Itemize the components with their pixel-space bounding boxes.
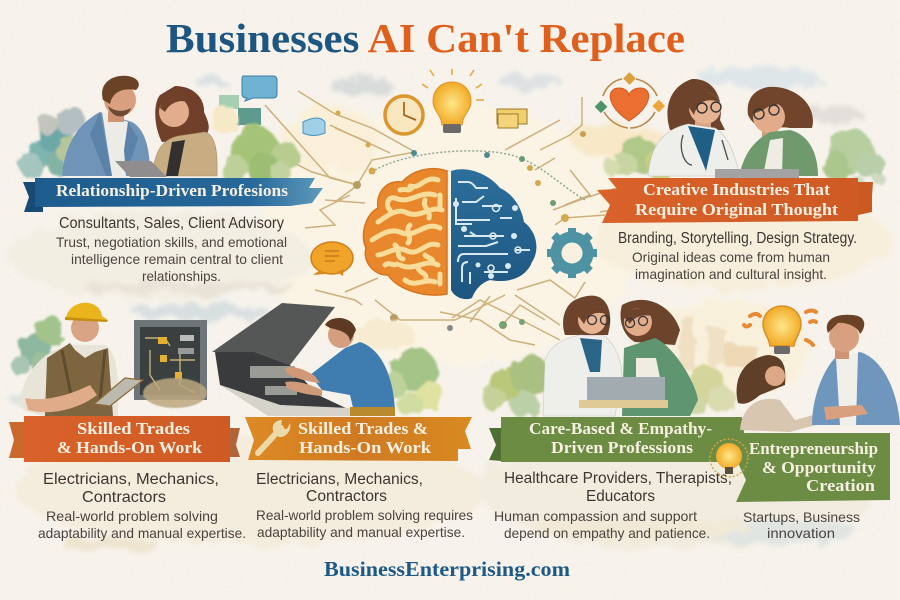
icon: ribbon bulb [710,439,748,477]
icon: heart with ring [595,72,665,128]
text: relationship: intelligence remain central to client [71,251,283,267]
brain illustration [363,169,536,299]
text: creative: Branding, Storytelling, Design Strategy. [618,230,857,247]
doctor [543,296,622,416]
ribbon: skilled trades amber [245,417,472,461]
text: skilled trades left: Real-world problem solving [46,508,218,524]
icon: light bulb [422,69,484,133]
electrician [20,303,118,416]
text: skilled trades right: Real-world problem solving requires [256,507,473,523]
woman with green jacket [739,87,818,176]
watercolor washes [10,69,890,552]
trees and city [483,318,756,419]
brain: blue right hemisphere [451,169,536,299]
text: skilled trades right: Contractors [306,488,387,505]
trees behind couple [18,105,299,186]
woman in green [621,300,698,416]
text: entrepreneurship: Startups, Business [743,509,860,525]
icon: speech bubble orange [311,242,353,276]
ribbon: creative [597,178,873,223]
panel: skilled trades (electrician) [9,303,246,541]
man in blue jacket [812,315,900,425]
trees behind doctors [604,128,886,195]
car with open hood [212,303,352,416]
text: entrepreneurship: innovation [767,525,835,541]
title: Businesses AI Can't Replace [166,15,685,61]
text: care: Healthcare Providers, Therapists, [504,470,732,487]
ribbon: relationship [23,178,323,212]
footer website: BusinessEnterprising.com [324,557,571,581]
icon: folders [497,109,527,128]
ribbon: entrepreneurship: Creation [806,476,876,495]
ribbon: care [489,417,748,462]
ribbon: creative: Creative Industries That [643,180,830,199]
brain: orange left hemisphere [363,169,447,295]
icon: chat bubbles [219,76,277,127]
text: entrepreneurship [743,509,860,541]
ribbon: care: Care-Based & Empathy- [529,419,712,438]
network lines [265,91,630,345]
text: skilled trades left: Electricians, Mechanics, [43,471,219,488]
text: skilled trades left: Contractors [82,489,166,506]
tablet [115,161,167,177]
laptop on shelf [579,377,668,408]
ribbon: entrepreneurship: Entrepreneurship [749,439,878,458]
text: relationship [56,215,287,284]
text: relationship: relationships. [142,268,221,284]
icon: data cylinder [303,118,325,136]
doctor in white coat [648,79,740,176]
icon: wrench [258,420,290,453]
electrical panel [134,320,207,408]
text: relationship: Trust, negotiation skills, and emotional [56,234,287,250]
ribbon: creative: Require Original Thought [635,200,838,219]
ribbon: skilled trades orange: & Hands-On Work [57,438,203,457]
text: care: Human compassion and support [494,508,697,524]
ribbon: skilled trades amber: Skilled Trades & [298,419,428,438]
text: skilled trades right: Electricians, Mechanics, [256,471,423,488]
tree right of mechanic [355,320,444,417]
laptop lid [715,169,799,178]
clipboard [94,378,143,406]
text: skilled trades right [256,471,473,540]
text: relationship: Consultants, Sales, Client Advisory [59,215,284,232]
icon: gear [547,228,597,278]
icon: clock [385,96,423,134]
ribbon: relationship: Relationship-Driven Profesions [56,181,288,200]
panel: creative industries [597,79,886,282]
text: skilled trades left: adaptability and manual expertise. [38,525,246,541]
panel: care-based professions [483,296,756,541]
text: care [494,470,732,541]
ribbon: entrepreneurship [730,433,890,502]
text: creative: Original ideas come from human [632,249,830,265]
text: skilled trades right: adaptability and manual expertise. [257,524,465,540]
ribbon: skilled trades orange: Skilled Trades [77,419,190,438]
ribbon: skilled trades amber: Hands-On Work [299,438,432,457]
text: creative [618,230,857,282]
mechanic [285,318,395,416]
panel: relationship-driven professions [18,76,323,284]
panel: entrepreneurship [710,306,900,541]
ribbon: entrepreneurship: & Opportunity [762,458,877,477]
man in blue jacket [62,76,150,176]
icon: idea bulb [744,306,816,354]
woman in tan jacket [152,86,217,176]
tree left [10,316,64,378]
text: care: Educators [586,488,655,505]
text: creative: imagination and cultural insight. [635,266,827,282]
text: skilled trades left [38,471,246,541]
text: care: depend on empathy and patience. [504,525,710,541]
panel: skilled trades (mechanic) [212,303,473,540]
ribbon: care: Driven Professions [551,438,693,457]
ribbon: skilled trades orange [9,416,240,462]
curly haired woman [737,355,834,432]
